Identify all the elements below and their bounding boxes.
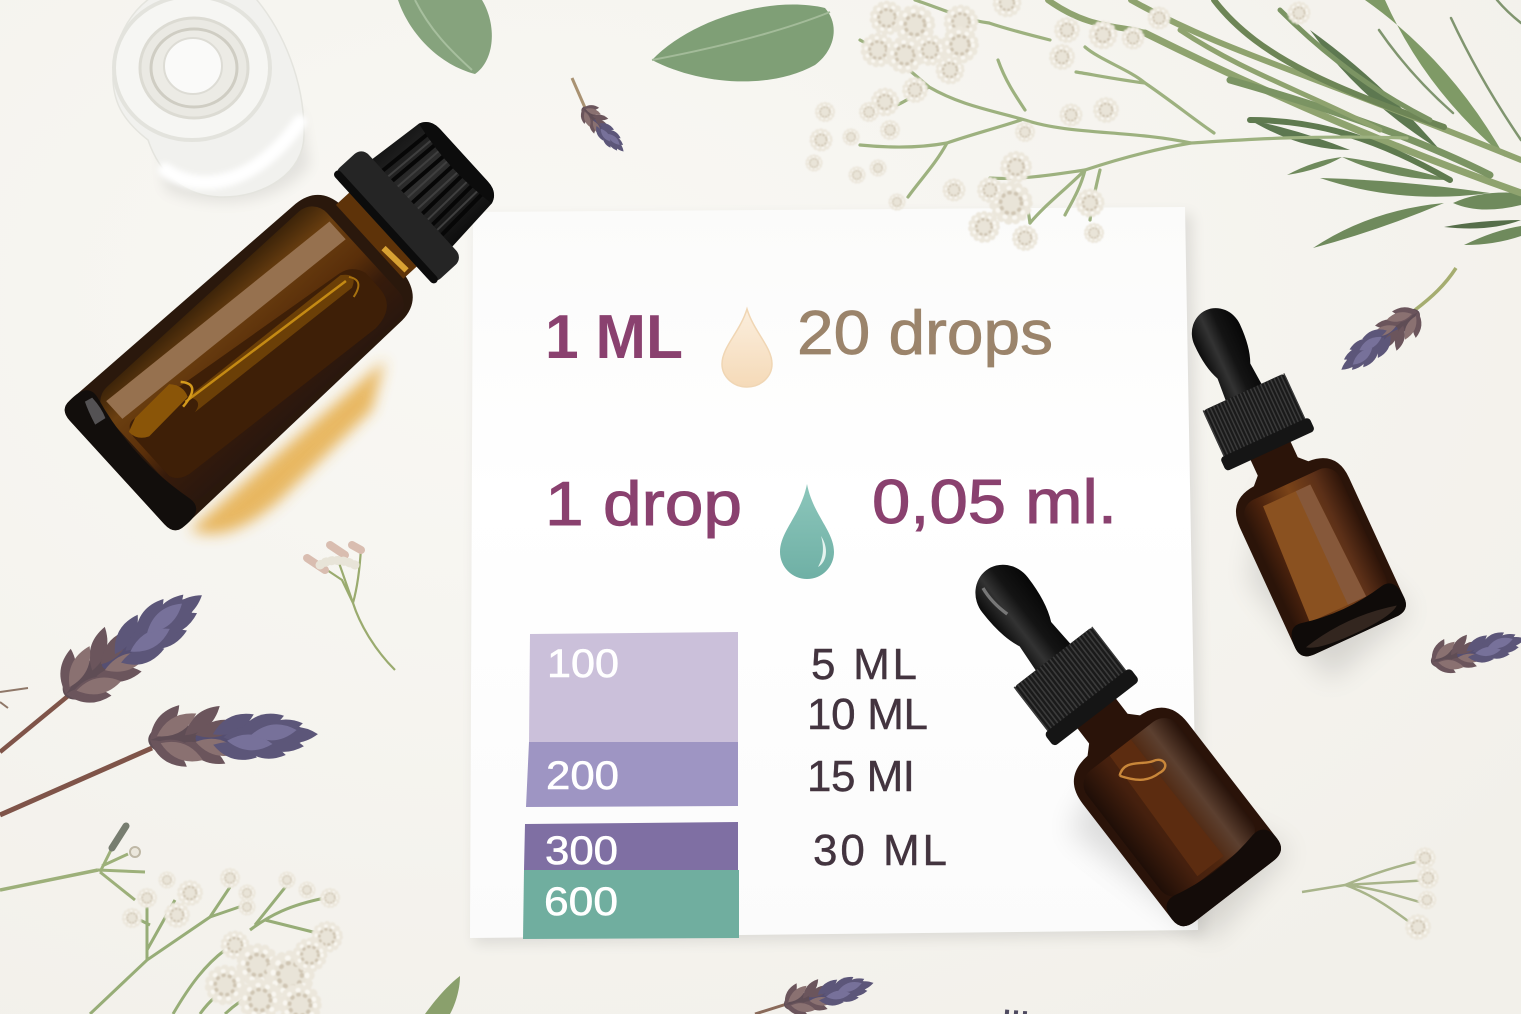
icon: teal drop	[780, 484, 834, 579]
thick glass base	[60, 385, 202, 535]
sprig: flowers bottom left	[90, 870, 340, 1014]
sprig: white flowers right	[1302, 849, 1437, 938]
sprig: lavender lower left	[0, 695, 319, 815]
bottle: centre dropper	[934, 530, 1287, 932]
body	[1042, 671, 1287, 932]
sprig: bottom centre leaf	[425, 976, 460, 1014]
body	[60, 176, 430, 535]
neck	[336, 190, 420, 279]
body	[1215, 423, 1410, 661]
icon: leaf top centre	[398, 0, 492, 74]
sprig: small lavender top	[572, 78, 634, 160]
row 300 drops	[524, 822, 738, 873]
sprig: lavender right	[1330, 268, 1456, 388]
cap	[1161, 290, 1315, 471]
sprig: top right greenery	[860, 0, 1521, 248]
table: drop counts to millilitres	[523, 632, 947, 939]
long leaves	[1250, 0, 1521, 248]
stems	[1048, 0, 1521, 193]
oil column	[125, 237, 398, 498]
sprig: pale flower stem	[307, 545, 395, 670]
bottle: right dropper	[1151, 285, 1410, 661]
heading line: 1 ML equals 20 drops	[545, 299, 1053, 387]
cap	[943, 537, 1140, 747]
line: 1 drop equals 0,05 ml	[545, 468, 1117, 579]
row 600 drops: 600	[544, 880, 618, 924]
label 10 ML: 10 ML	[807, 690, 928, 739]
row 100 drops: 100	[547, 642, 619, 686]
label 15 Ml: 15 MI	[807, 752, 915, 801]
pale reflection band	[106, 208, 346, 432]
sprig: small green bottom left	[0, 826, 145, 900]
line: 1 drop equals 0,05 ml: 1 drop	[545, 470, 742, 539]
paper shadow	[474, 214, 1204, 944]
row 100 drops	[529, 632, 738, 742]
bottle: large amber	[60, 93, 522, 535]
row 600 drops	[523, 870, 739, 939]
paper card	[470, 207, 1198, 939]
label 5 ML: 5 ML	[811, 640, 917, 689]
shadow: right dropper	[1250, 480, 1410, 680]
row 200 drops	[526, 742, 738, 807]
sprig: lavender upper left	[0, 564, 222, 752]
row 200 drops: 200	[546, 754, 619, 798]
line: 1 drop equals 0,05 ml: 0,05 ml.	[872, 468, 1117, 537]
cap	[332, 100, 515, 285]
row 300 drops: 300	[545, 829, 618, 873]
heading line: 1 ML equals 20 drops: 1 ML	[545, 303, 683, 372]
label 30 ML: 30 ML	[813, 826, 947, 875]
icon: peach drop	[722, 309, 772, 387]
shadow: big bottle amber glow	[190, 360, 385, 534]
shadow: centre dropper	[1070, 760, 1290, 940]
heading line: 1 ML equals 20 drops: 20 drops	[797, 299, 1053, 368]
sprig: lavender bottom	[755, 962, 1030, 1014]
icon: glass stopper	[113, 0, 310, 202]
flower clusters: top right	[807, 0, 1309, 249]
icon: leaf large	[652, 5, 834, 81]
sprig: lavender right edge	[1423, 617, 1521, 682]
